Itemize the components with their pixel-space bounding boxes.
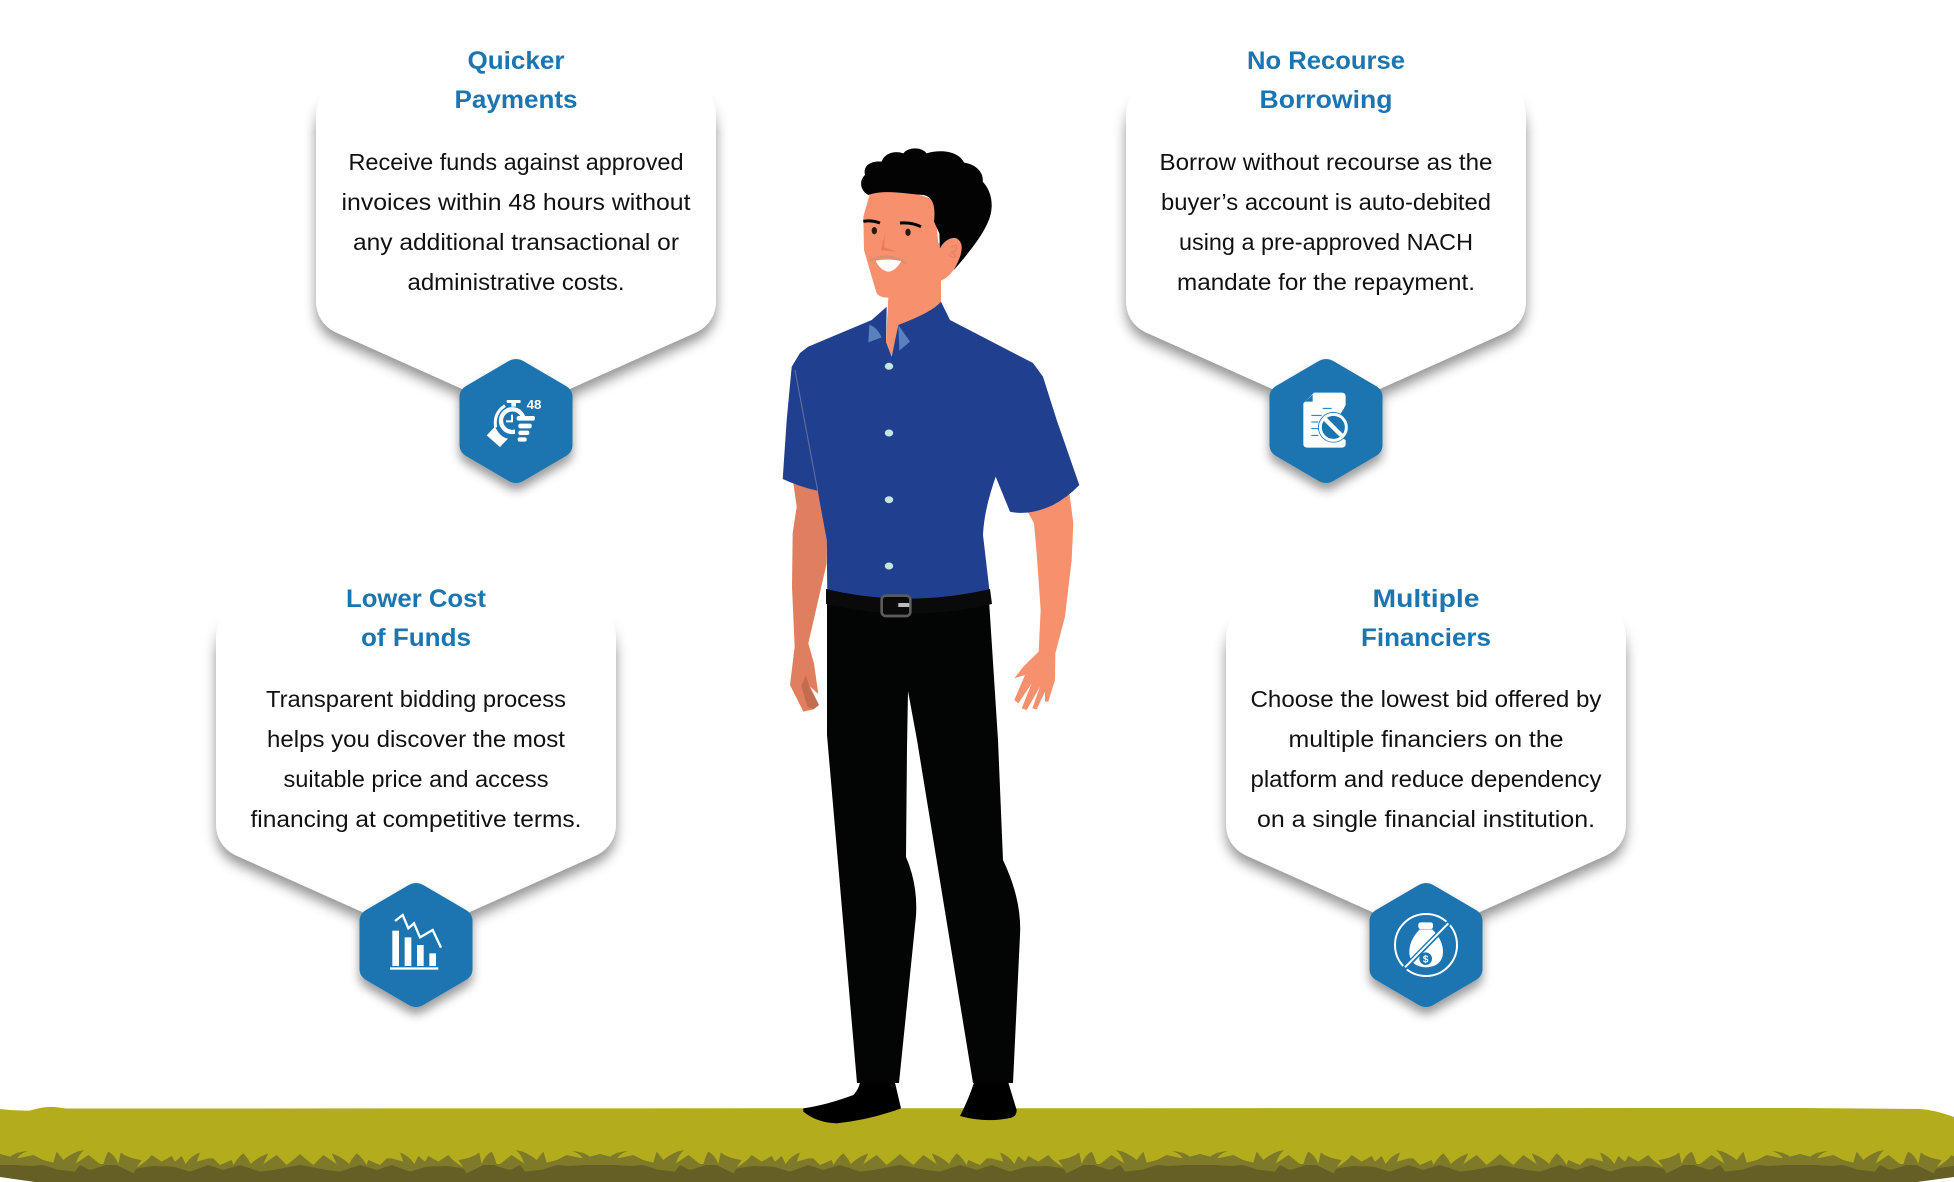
- shirt: [783, 302, 1079, 610]
- collar: [868, 325, 910, 351]
- head: [861, 148, 992, 357]
- card shape: [296, 70, 736, 413]
- body text: using a pre-approved NACH: [1179, 229, 1473, 255]
- body text: platform and reduce dependency: [1250, 766, 1602, 792]
- trousers: [827, 600, 1020, 1083]
- card shape: [1106, 70, 1546, 413]
- body text: buyer’s account is auto-debited: [1161, 189, 1491, 215]
- body text: mandate for the repayment.: [1177, 269, 1475, 295]
- body text: Receive funds against approved: [348, 149, 684, 175]
- eyes: [872, 227, 911, 236]
- heading: Quicker: [468, 47, 565, 75]
- illustration: standing man: [783, 148, 1079, 1123]
- eyebrows: [863, 221, 921, 227]
- ear detail: [949, 246, 957, 257]
- panel: no recourse borrowing: [1106, 47, 1546, 483]
- panel: multiple financiers: [1206, 585, 1646, 1007]
- body text: financing at competitive terms.: [250, 806, 582, 832]
- heading: of Funds: [361, 624, 471, 652]
- heading: No Recourse: [1247, 47, 1405, 75]
- belt buckle: [882, 596, 910, 616]
- left shoe: [803, 1083, 901, 1123]
- body text: [1250, 686, 1602, 832]
- nose: [881, 233, 896, 252]
- ground with grass: [0, 1107, 1954, 1182]
- belt: [826, 589, 992, 614]
- left hand shadow: [801, 675, 819, 709]
- body text: any additional transactional or: [353, 229, 679, 255]
- icon: document with prohibition sign: [1270, 359, 1382, 483]
- body text: suitable price and access: [284, 766, 548, 792]
- body text: [342, 149, 691, 295]
- body text: administrative costs.: [408, 269, 624, 295]
- heading: [1361, 585, 1491, 652]
- shirt buttons: [885, 363, 893, 570]
- body text: Borrow without recourse as the: [1160, 149, 1492, 175]
- body text: Choose the lowest bid offered by: [1250, 686, 1602, 712]
- moustache: [870, 257, 906, 263]
- heading: Lower Cost: [346, 585, 487, 613]
- card shape: [1206, 593, 1646, 936]
- right arm: [1014, 490, 1073, 710]
- heading: Borrowing: [1260, 86, 1392, 114]
- smile: [876, 260, 901, 272]
- card shape: [196, 593, 636, 936]
- heading: Financiers: [1361, 624, 1491, 652]
- icon: crossed-out money bag: [1370, 883, 1482, 1007]
- panel: quicker payments: [296, 47, 736, 483]
- body text: on a single financial institution.: [1257, 806, 1595, 832]
- right shoe: [960, 1083, 1017, 1120]
- icon: falling bar chart: [360, 883, 472, 1007]
- panel: lower cost of funds: [196, 585, 636, 1007]
- icon: stopwatch in hand: [460, 359, 572, 483]
- body text: [250, 686, 582, 832]
- heading: [454, 47, 578, 114]
- left arm: [790, 483, 827, 712]
- hair: [861, 148, 992, 271]
- icon: crossed-out money bag: $: [1423, 954, 1429, 965]
- body text: invoices within 48 hours without: [342, 189, 691, 215]
- body text: [1160, 149, 1492, 295]
- heading: Payments: [454, 86, 578, 114]
- sleeve seam: [795, 370, 818, 491]
- heading: Multiple: [1372, 585, 1480, 613]
- body text: helps you discover the most: [267, 726, 566, 752]
- body text: multiple financiers on the: [1288, 726, 1564, 752]
- body text: Transparent bidding process: [266, 686, 566, 712]
- heading: [1247, 47, 1405, 114]
- heading: [346, 585, 487, 652]
- icon: stopwatch in hand: 48: [527, 397, 541, 412]
